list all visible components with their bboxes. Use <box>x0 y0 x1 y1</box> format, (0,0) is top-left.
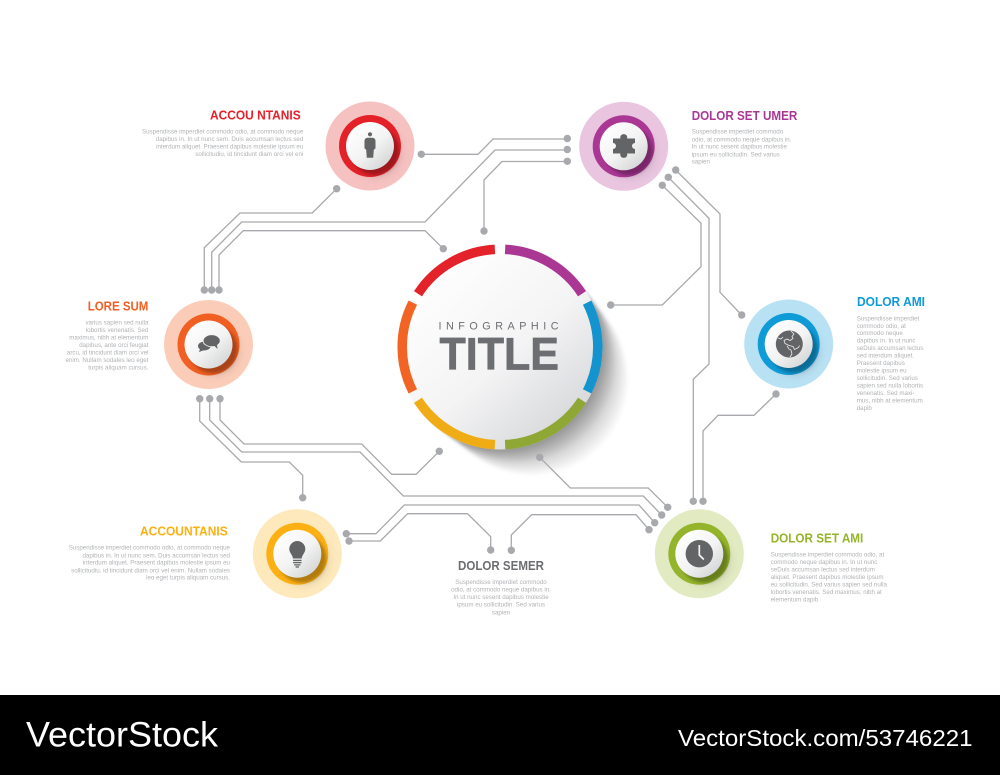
text: dolor semer: ipsum eu sollicitudin. Sed varius <box>457 602 545 609</box>
text: accountanis: leo eget turpis aliquam cursus. <box>146 575 230 582</box>
text: accou ntanis: ACCOU NTANIS <box>210 108 301 122</box>
text: dolor ami: Praesent dapibus <box>857 360 905 367</box>
text: dolor ami: dapibus in. In ut nunc <box>857 338 916 345</box>
footer bar <box>0 695 1000 775</box>
icon: clock <box>686 540 713 567</box>
text: accountanis: ACCOUNTANIS <box>140 524 228 538</box>
text: dolor ami: dapib <box>857 405 872 412</box>
text: dolor ami: venenatis. Sed maxi- <box>857 390 914 397</box>
node: blue globe <box>744 300 833 388</box>
icon: globe <box>776 330 803 358</box>
connector lines <box>196 135 780 554</box>
text: dolor ami: DOLOR AMI <box>857 295 925 309</box>
ring segments <box>402 249 598 445</box>
title: TITLE <box>440 329 559 380</box>
text: dolor ami <box>857 295 925 412</box>
footer bar: VectorStock.com/53746221 <box>678 725 972 751</box>
text: dolor set umer <box>692 109 797 166</box>
text: dolor set umer: sapien <box>692 159 710 166</box>
text: accou ntanis: interdum aliquet. Praesent dapibus molestie ipsum eu <box>156 144 304 150</box>
text: lore sum: dapibus, ante orci feugiat <box>79 342 149 349</box>
text: lore sum: LORE SUM <box>88 300 148 314</box>
central disc <box>398 244 602 450</box>
text: accountanis <box>69 524 231 582</box>
node: purple puzzle <box>579 102 668 191</box>
text: dolor set umer: odio, at commodo neque dapibus in. <box>692 136 792 143</box>
node: green clock <box>655 509 744 598</box>
text: dolor set umer: DOLOR SET UMER <box>692 109 797 123</box>
text: dolor set umer: Suspendisse imperdiet commodo <box>692 129 784 136</box>
icon: light bulb <box>289 541 305 568</box>
text: dolor ami: Suspendisse imperdiet <box>857 315 920 322</box>
node: yellow bulb <box>253 509 342 598</box>
text: dolor ami: sapien sed nulla lobortis <box>857 382 923 390</box>
icon: speech bubbles <box>198 335 220 352</box>
text: dolor semer: sapien <box>492 609 511 616</box>
text: dolor semer: odio, at commodo neque dapibus in. <box>451 587 551 594</box>
text: accou ntanis: dapibus in. In ut nunc sem. Duis accumsan lectus sed <box>156 136 304 143</box>
text: lore sum: arcu, id tincidunt diam orci vel <box>67 350 148 357</box>
footer bar: VectorStock <box>26 716 219 755</box>
text: dolor semer: Suspendisse imperdiet commodo <box>455 579 547 586</box>
text: dolor set ami: seDuis accumsan lectus sed interdum <box>771 567 875 574</box>
text: dolor ami: mus, nibh at elementum <box>857 398 923 404</box>
node: orange chat <box>164 300 253 389</box>
central long shadow <box>400 247 628 475</box>
text: dolor semer: In ut nunc sesent dapibus molestie <box>453 594 549 601</box>
text: dolor set ami: eu sollicitudin. Sed varius sapien sed nulla <box>771 581 888 588</box>
icon: person <box>364 132 376 158</box>
text: dolor set ami: lobortis venenatis. Sed maximus, nibh at <box>771 589 882 596</box>
text: dolor ami: molestie ipsum eu <box>857 368 907 375</box>
text: dolor ami: commodo odio, at <box>857 323 906 330</box>
text: dolor set ami: elementum dapib <box>771 597 819 604</box>
title: INFOGRAPHIC <box>438 320 559 332</box>
icon: puzzle <box>613 134 635 158</box>
text: dolor ami: sed interdum aliquet. <box>857 353 914 360</box>
text: lore sum: maximus, nibh at elementum <box>69 335 148 342</box>
text: dolor set umer: ipsum eu sollicitudin. Sed varius <box>692 151 780 158</box>
text: lore sum: enim. Nullam sodales leo eget <box>66 357 149 364</box>
text: accountanis: sollicitudiu, id tincidunt diam orci vel enim. Nullam sodales <box>71 567 230 574</box>
text: dolor set umer: In ut nunc sesent dapibus molestie <box>692 144 788 151</box>
text: accou ntanis: Suspendisse imperdiet commodo odio, at commodo neque <box>142 128 304 136</box>
text: accou ntanis: sollicitudiu, id tincidunt diam orci vel eni <box>195 151 303 158</box>
text: accountanis: dapibus in. In ut nunc sem. Duis accumsan lectus sed <box>82 552 231 559</box>
text: lore sum: varius sapien sed nulla <box>85 320 149 327</box>
text: dolor ami: seDuis accumsan lectus <box>857 345 923 352</box>
text: dolor set ami <box>771 531 888 604</box>
text: dolor set ami: Suspendisse imperdiet commodo odio, at <box>771 551 884 558</box>
text: accou ntanis <box>142 108 304 158</box>
text: lore sum: lobortis venenatis. Sed <box>86 327 149 334</box>
text: dolor set ami: commodo neque dapibus in. In ut nunc <box>771 559 877 566</box>
text: dolor set ami: aliquet. Praesent dapibus molestie ipsum <box>771 574 884 581</box>
node: red person <box>326 102 414 190</box>
text: dolor ami: commodo neque <box>857 330 903 337</box>
text: dolor semer: DOLOR SEMER <box>458 559 544 573</box>
text: dolor set ami: DOLOR SET AMI <box>771 531 863 545</box>
text: accountanis: interdum aliquet. Praesent dapibus molestie ipsum eu <box>83 560 231 567</box>
text: dolor ami: sollicitudin. Sed varius <box>857 375 918 382</box>
text: lore sum <box>66 300 149 372</box>
text: accountanis: Suspendisse imperdiet commodo odio, at commodo neque <box>69 545 231 552</box>
text: dolor semer <box>451 559 551 616</box>
text: lore sum: turpis aliquam cursus. <box>88 365 149 372</box>
